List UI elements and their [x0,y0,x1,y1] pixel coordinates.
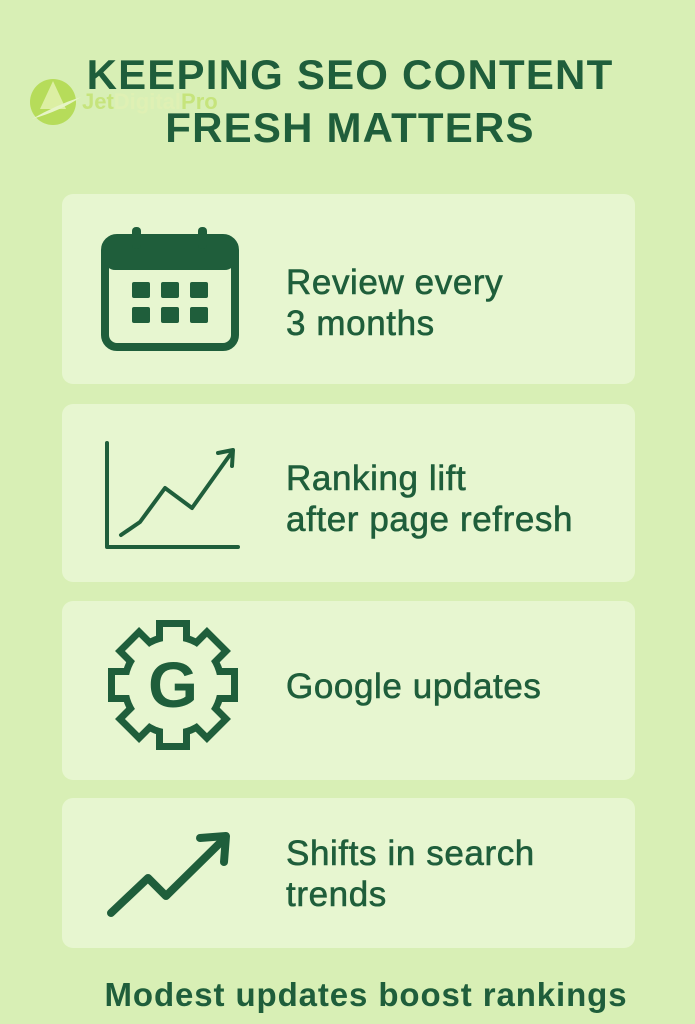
text: ranking: Ranking lift [286,459,466,498]
title: FRESH MATTERS [165,104,535,151]
text: review: 3 months [286,304,435,343]
text: review [286,263,503,343]
footer text: Modest updates boost rankings [104,976,628,1013]
panel: trends [62,798,635,948]
text: trends: Shifts in search [286,834,535,873]
panel: ranking [62,404,635,582]
text: trends [286,834,535,914]
panel: google [62,601,635,780]
logo [30,79,218,125]
logo: JetDigitalPro [82,89,218,114]
title [87,51,613,151]
panel: review [62,194,635,384]
icon: google gear: G [148,649,198,721]
title: KEEPING SEO CONTENT [87,51,613,98]
text: ranking [286,459,573,539]
text: ranking: after page refresh [286,500,573,539]
text: review: Review every [286,263,503,302]
text: trends: trends [286,875,387,914]
text: google: Google updates [286,667,542,706]
